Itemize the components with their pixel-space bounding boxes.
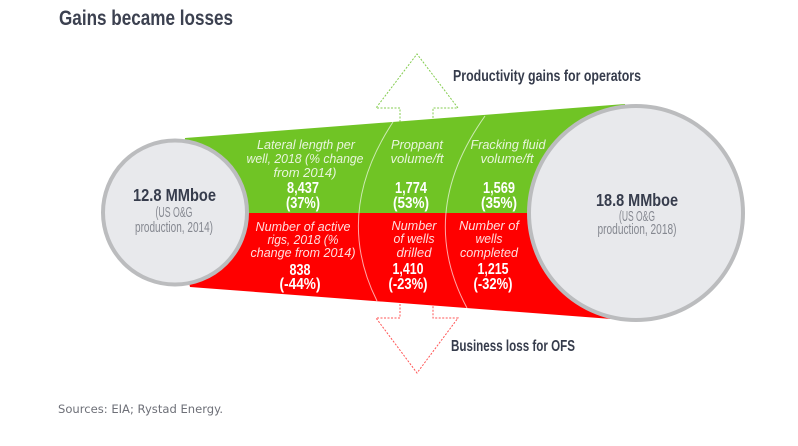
right circle: 2018 production: (US O&G	[619, 209, 655, 225]
left circle: 2014 production: production, 2014)	[135, 220, 213, 236]
left circle: 2014 production: (US O&G	[156, 205, 192, 221]
metric: wells drilled: Number	[392, 218, 437, 233]
metric: fracking fluid: (35%)	[481, 195, 517, 212]
metric: active rigs: rigs, 2018 (%	[268, 232, 338, 247]
metric: active rigs: (-44%)	[280, 276, 320, 293]
metric: active rigs	[250, 219, 356, 293]
metric: proppant volume: (53%)	[393, 195, 429, 212]
right circle: 2018 production: production, 2018)	[598, 222, 676, 238]
metric: lateral length: (37%)	[286, 195, 320, 212]
metric: active rigs: change from 2014)	[250, 245, 356, 260]
metric: proppant volume: volume/ft	[390, 151, 445, 166]
source note: Sources: EIA; Rystad Energy.	[58, 402, 223, 416]
metric: wells drilled	[388, 218, 437, 293]
metric: fracking fluid: Fracking fluid	[470, 137, 546, 152]
metric: lateral length	[246, 137, 364, 212]
metric: fracking fluid: volume/ft	[480, 151, 535, 166]
icon: down arrow, business loss	[376, 304, 458, 373]
panel: green productivity band	[175, 104, 636, 213]
metric: proppant volume	[390, 137, 445, 212]
label: business loss: Business loss for OFS	[451, 338, 575, 355]
metric: proppant volume: 1,774	[395, 180, 427, 197]
metric: fracking fluid: 1,569	[483, 180, 515, 197]
metric: lateral length: well, 2018 (% change	[246, 151, 364, 166]
metric: wells drilled: 1,410	[392, 261, 424, 278]
metric: active rigs: 838	[290, 262, 311, 279]
left circle: 2014 production	[103, 140, 247, 284]
title: Gains became losses	[59, 7, 233, 30]
left circle: 2014 production: 12.8 MMboe	[133, 185, 216, 205]
metric: lateral length: Lateral length per	[257, 137, 356, 152]
metric: wells completed: completed	[460, 245, 519, 260]
metric: lateral length: 8,437	[287, 180, 319, 197]
label: productivity gains: Productivity gains for operators	[453, 68, 641, 85]
right circle: 2018 production: 18.8 MMboe	[596, 190, 678, 210]
metric: active rigs: Number of active	[256, 219, 350, 234]
metric: wells drilled: drilled	[396, 245, 432, 260]
metric: proppant volume: Proppant	[391, 137, 444, 152]
icon: up arrow, productivity gains	[376, 54, 458, 122]
metric: wells completed: 1,215	[478, 261, 509, 278]
metric: fracking fluid	[470, 137, 546, 212]
metric: wells completed: Number of	[459, 218, 520, 233]
panel: red business loss band	[175, 213, 636, 320]
metric: wells completed	[459, 218, 520, 293]
metric: lateral length: from 2014)	[274, 165, 336, 180]
metric: wells completed: (-32%)	[474, 276, 512, 293]
metric: wells drilled: of wells	[394, 231, 435, 246]
metric: wells completed: wells	[476, 231, 503, 246]
right circle: 2018 production	[529, 106, 743, 320]
metric: wells drilled: (-23%)	[388, 276, 428, 293]
